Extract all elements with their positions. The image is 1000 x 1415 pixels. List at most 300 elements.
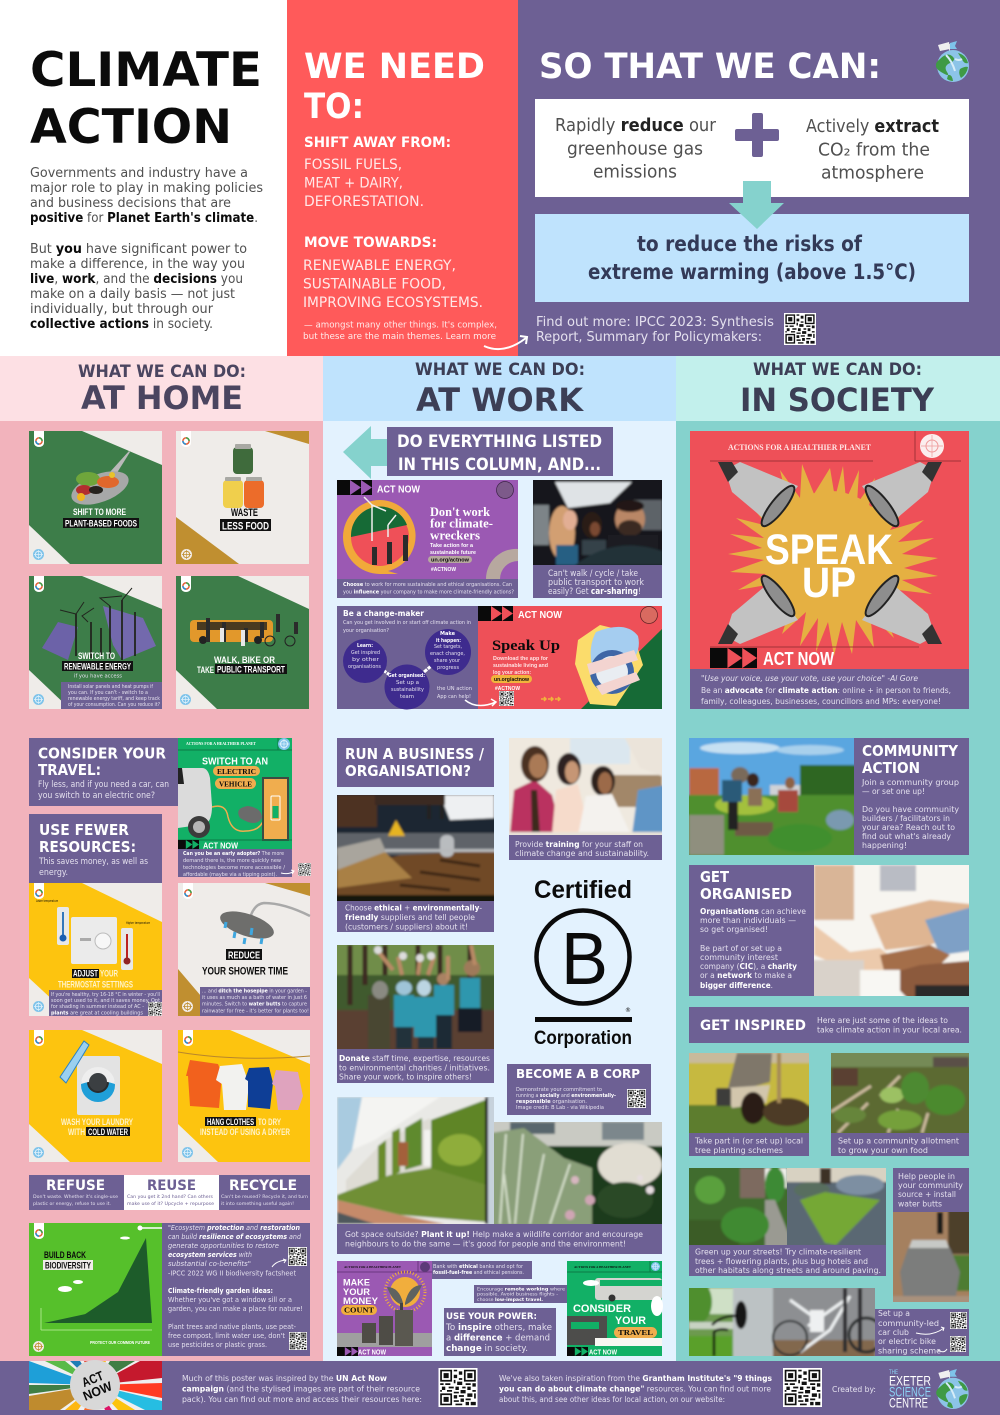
panel: we need to: — amongst many other things. It's complex, bbox=[304, 320, 497, 330]
panel: be a change-maker: Make bbox=[440, 631, 455, 637]
photo: staff training bbox=[509, 738, 662, 835]
panel: be a change-maker: organisations bbox=[348, 664, 381, 670]
intro text block: But you have significant power to bbox=[30, 242, 247, 257]
card: wash laundry cold: COLD WATER bbox=[88, 1127, 128, 1138]
text: un act now credit: pack). You can find out more and access their resources here: bbox=[182, 1395, 422, 1404]
card: adjust thermostat: YOUR bbox=[100, 968, 118, 978]
photo card: green up your streets: trees + flowering plants, plus bug hotels and bbox=[695, 1257, 868, 1266]
panel: ecosystem quote and garden ideas: garden, you can make a place for nature! bbox=[168, 1305, 303, 1313]
heading: run a business: RUN A BUSINESS / bbox=[345, 745, 484, 763]
text: grantham institute credit: you can do about climate change" resources. You can find out more bbox=[499, 1384, 771, 1394]
card: speak up app: sustainable living and bbox=[493, 663, 548, 669]
card: waste less food bbox=[176, 431, 309, 564]
card: switch to electric vehicle bbox=[178, 738, 294, 878]
card: build back biodiversity: PROTECT OUR COMMON FUTURE bbox=[90, 1340, 150, 1345]
card: consider your travel (bus and train): ACT NOW bbox=[589, 1350, 617, 1356]
card: don't work for climate-wreckers: for climate- bbox=[430, 516, 493, 530]
card: don't work for climate-wreckers bbox=[337, 480, 518, 598]
photo card: community action bbox=[679, 728, 969, 865]
panel: reuse: make use of it? Upcycle + repurpose bbox=[127, 1201, 214, 1207]
banner: do everything listed: DO EVERYTHING LISTED bbox=[397, 432, 602, 452]
photo: coffee roaster bbox=[337, 795, 494, 901]
panel: become a b corp: running a socially and environmentally- bbox=[516, 1093, 616, 1099]
photo card: community allotment: Set up a community allotment bbox=[838, 1136, 959, 1146]
card: reduce shower time bbox=[178, 883, 310, 1016]
photo: ev charger bbox=[689, 1288, 753, 1356]
card: speak up app: log your action: bbox=[493, 670, 531, 676]
logo: act now sunburst: ACT bbox=[80, 1368, 106, 1390]
card: plant-based foods: SHIFT TO MORE bbox=[73, 507, 126, 518]
photo card: coffee suppliers bbox=[327, 785, 504, 932]
card: walk, bike, public transport bbox=[176, 576, 309, 709]
card: don't work for climate-wreckers: un.org/actnow bbox=[431, 558, 470, 564]
photo: flowers and grasses bbox=[494, 1122, 662, 1224]
panel: be a change-maker: sustainability bbox=[391, 687, 424, 693]
panel: be a change-maker: Be a change-maker bbox=[343, 609, 424, 618]
heading: at home bbox=[78, 362, 246, 417]
card: speak up app bbox=[478, 606, 662, 709]
photo: joined hands bbox=[814, 865, 969, 996]
panel: use your power: USE YOUR POWER: bbox=[446, 1312, 537, 1322]
panel: use fewer resources bbox=[29, 814, 162, 883]
photo card: community allotment: to grow your own food bbox=[838, 1146, 928, 1155]
panel: use your power: change in society. bbox=[446, 1344, 528, 1354]
text: grantham institute credit: We've also taken inspiration from the Grantham Institute's "9 things bbox=[499, 1374, 772, 1383]
photo card: plant it up: Got space outside? Plant it up! Help make a wildlife corridor and encourage bbox=[345, 1230, 643, 1239]
card: walk, bike, public transport: PUBLIC TRANSPORT bbox=[217, 664, 285, 676]
panel: be a change-maker: by other bbox=[352, 657, 380, 663]
card: don't work for climate-wreckers: Don't work bbox=[430, 505, 490, 519]
panel: become a b corp bbox=[507, 1064, 651, 1115]
card: plant-based foods: PLANT-BASED FOODS bbox=[65, 518, 137, 530]
intro text block: major role to play in making policies bbox=[30, 181, 263, 196]
heading: at work bbox=[415, 360, 585, 419]
heading: at work: AT WORK bbox=[416, 381, 584, 419]
photo card: get organised: or a network to make a bbox=[700, 971, 792, 980]
panel: be a change-maker: progress bbox=[437, 665, 459, 671]
text box: ethical banks: Bank with ethical banks and opt for bbox=[433, 1264, 523, 1270]
photo card: community action: COMMUNITY bbox=[862, 742, 959, 760]
card: adjust thermostat: for shading in summer instead of AC - bbox=[51, 1004, 144, 1010]
panel: car club bbox=[875, 1309, 969, 1356]
card: switch to electric vehicle: ELECTRIC bbox=[217, 768, 256, 776]
panel: consider your travel: you switch to an electric one? bbox=[38, 791, 155, 801]
logo: exeter science centre: EXETER bbox=[889, 1374, 931, 1388]
card: waste less food: LESS FOOD bbox=[222, 520, 269, 532]
icon: sunburst bbox=[728, 464, 938, 656]
panel: ecosystem quote and garden ideas: free compost, limit water use, don't bbox=[168, 1332, 285, 1340]
panel: we need to: MOVE TOWARDS: bbox=[304, 235, 437, 251]
card: make your money count: MONEY bbox=[343, 1296, 379, 1307]
photo: people in car bbox=[533, 480, 662, 565]
intro text block: live, work, and the decisions you bbox=[30, 272, 243, 287]
photo card: community action: — or set one up! bbox=[862, 787, 925, 796]
photo card: green up your streets bbox=[679, 1158, 896, 1276]
card: speak up app: un.org/actnow bbox=[494, 677, 530, 683]
box: reduce and extract: atmosphere bbox=[821, 164, 924, 184]
logo: exeter science centre bbox=[889, 1369, 969, 1410]
photo: bike share bbox=[753, 1288, 875, 1356]
text: grantham institute credit: about this, and see other ideas for local action, on our website: bbox=[499, 1395, 725, 1404]
text box: ethical banks bbox=[432, 1261, 532, 1279]
panel: be a change-maker: your organisation? bbox=[343, 628, 389, 634]
card: speak up poster: "Use your voice, use your vote, use your choice" -Al Gore bbox=[701, 674, 918, 683]
panel: we need to: but these are the main themes. Learn more bbox=[303, 332, 496, 342]
intro text block: individually, but through our bbox=[30, 302, 214, 317]
card: plant-based foods bbox=[29, 431, 162, 564]
box: reduce and extract: CO₂ from the bbox=[818, 140, 930, 160]
text: find out more bbox=[536, 314, 774, 345]
card: renewable energy: SWITCH TO bbox=[78, 651, 115, 662]
panel: be a change-maker: team bbox=[400, 694, 414, 700]
card: make your money count: ACTIONS FOR A HEALTHIER PLANET bbox=[344, 1265, 401, 1269]
photo card: water butts: source + install bbox=[898, 1190, 956, 1199]
photo card: donate staff time bbox=[327, 935, 504, 1083]
card: consider your travel (bus and train): TRAVEL bbox=[618, 1328, 653, 1337]
heading: run a business bbox=[337, 738, 494, 787]
photo card: get organised: Be part of or set up a bbox=[700, 944, 782, 953]
panel: consider your travel bbox=[29, 738, 178, 806]
arrow: down bbox=[729, 181, 784, 229]
card: don't work for climate-wreckers: you influence your company to make more climate-friendly actions? bbox=[343, 590, 514, 596]
card: don't work for climate-wreckers: Choose to work for more sustainable and ethical organisations. Can bbox=[343, 582, 512, 588]
panel: ecosystem quote and garden ideas: Climate-friendly garden ideas: bbox=[168, 1287, 273, 1295]
text: find out more: Report, Summary for Policymakers: bbox=[536, 329, 762, 345]
card: speak up app: #ACTNOW bbox=[495, 686, 521, 692]
card: switch to electric vehicle: demand there is, the more quickly new bbox=[183, 858, 281, 864]
panel: refuse: plastic or energy, refuse to use it. bbox=[33, 1201, 111, 1207]
panel: be a change-maker: Learn: bbox=[357, 643, 373, 649]
panel: car club: community-led bbox=[878, 1319, 939, 1328]
intro text block: make on a daily basis — not just bbox=[30, 287, 235, 302]
photo card: get organised: more than individuals — bbox=[700, 916, 797, 925]
card: adjust thermostat: ADJUST bbox=[73, 968, 98, 978]
panel: we need to bbox=[303, 47, 497, 342]
card: consider your travel (bus and train) bbox=[567, 1261, 663, 1356]
text: un act now credit: Much of this poster was inspired by the UN Act Now bbox=[182, 1374, 388, 1383]
panel: become a b corp: Image credit: B Lab - via Wikipedia bbox=[516, 1105, 604, 1111]
card: waste less food: WASTE bbox=[231, 507, 258, 519]
card: reduce shower time: REDUCE bbox=[228, 950, 260, 962]
panel: reuse: REUSE bbox=[147, 1178, 196, 1194]
card: hang clothes: TO DRY bbox=[258, 1117, 281, 1128]
photo card: training bbox=[499, 728, 672, 860]
intro text block: and business decisions that are bbox=[30, 196, 231, 211]
panel: recycle: Can't be reused? Recycle it, and turn bbox=[221, 1194, 308, 1200]
box: reduce and extract: Actively extract bbox=[806, 117, 939, 137]
panel: get inspired: GET INSPIRED bbox=[700, 1018, 806, 1034]
photo card: car sharing: Can't walk / cycle / take bbox=[548, 569, 638, 579]
photo card: get organised: so get organised! bbox=[700, 925, 768, 934]
card: walk, bike, public transport: TAKE bbox=[197, 665, 214, 676]
heading: run a business: ORGANISATION? bbox=[345, 762, 471, 780]
text: created by: Created by: bbox=[832, 1385, 876, 1394]
card: don't work for climate-wreckers: Take action for a bbox=[430, 543, 474, 549]
panel: use your power bbox=[444, 1308, 556, 1356]
panel: we need to: SHIFT AWAY FROM: bbox=[304, 135, 451, 151]
panel: reuse: Can you get it 2nd hand? Can others bbox=[127, 1194, 214, 1200]
panel: get inspired bbox=[689, 1007, 969, 1043]
qr code bbox=[783, 1368, 822, 1407]
card: speak up poster: Be an advocate for climate action: online + in person to friends, bbox=[701, 686, 951, 695]
photo card: community allotment bbox=[821, 1043, 979, 1156]
qr code bbox=[438, 1368, 478, 1407]
panel: refuse: Don't waste. Whether it's single-use bbox=[33, 1194, 118, 1200]
panel: so that we can: SO THAT WE CAN: bbox=[539, 47, 881, 87]
card: reduce shower time: ... and ditch the hosepipe in your garden - bbox=[202, 988, 307, 994]
card: switch to electric vehicle: ACT NOW bbox=[203, 842, 238, 850]
panel: car club: car club bbox=[878, 1328, 909, 1337]
icon: megaphones bbox=[718, 462, 942, 644]
photo card: tree planting: Take part in (or set up) local bbox=[694, 1136, 803, 1146]
text: grantham institute credit bbox=[499, 1374, 772, 1404]
logo: certified b corporation: ® bbox=[625, 1007, 631, 1014]
card: walk, bike, public transport: WALK, BIKE OR bbox=[214, 655, 275, 666]
card: switch to electric vehicle: VEHICLE bbox=[219, 780, 252, 788]
card: renewable energy: Install solar panels and heat pumps if bbox=[68, 684, 153, 690]
card: make your money count: MAKE bbox=[343, 1278, 370, 1288]
logo: exeter science centre: THE bbox=[889, 1370, 898, 1376]
card: make your money count: COUNT bbox=[344, 1306, 374, 1314]
panel: use your power: a difference + demand bbox=[446, 1334, 550, 1344]
heading: at home: AT HOME bbox=[81, 379, 243, 417]
photo card: coffee suppliers: friendly suppliers and tell people bbox=[345, 913, 475, 922]
photo card: get organised: company (CIC), a charity bbox=[700, 962, 797, 971]
photo card: training: climate change and sustainability. bbox=[515, 849, 649, 858]
photo card: water butts: Help people in bbox=[898, 1172, 955, 1181]
title: climate action: CLIMATE bbox=[30, 43, 262, 98]
panel: use fewer resources: RESOURCES: bbox=[39, 838, 136, 856]
card: speak up app: Speak Up bbox=[492, 638, 560, 654]
box: reduce risks: extreme warming (above 1.5°C) bbox=[588, 260, 916, 284]
panel: we need to: TO: bbox=[304, 87, 364, 127]
title: climate action bbox=[30, 43, 262, 155]
panel: ecosystem quote and garden ideas: "Ecosystem protection and restoration bbox=[168, 1224, 300, 1232]
panel: use fewer resources: USE FEWER bbox=[39, 821, 129, 839]
photo card: coffee suppliers: (customers / suppliers) about it! bbox=[345, 922, 468, 932]
card: make your money count: YOUR bbox=[343, 1287, 370, 1298]
photo card: training: Provide training for your staff on bbox=[515, 840, 643, 849]
panel: we need to: SUSTAINABLE FOOD, bbox=[303, 276, 446, 292]
card: switch to electric vehicle: affordable (maybe via a tipping point). bbox=[183, 872, 277, 878]
box: reduce and extract: emissions bbox=[593, 162, 677, 182]
card: speak up app: Download the app for bbox=[493, 656, 549, 662]
card: speak up poster: family, colleagues, businesses, councillors and MPs: everyone! bbox=[701, 697, 941, 706]
panel: we need to: DEFORESTATION. bbox=[304, 194, 424, 210]
panel: become a b corp: Demonstrate your commitment to bbox=[516, 1087, 602, 1093]
photo: flower bed bbox=[787, 1168, 886, 1245]
card: adjust thermostat bbox=[29, 883, 162, 1016]
photo card: donate staff time: Donate staff time, expertise, resources bbox=[339, 1054, 490, 1063]
panel: use fewer resources: This saves money, as well as bbox=[38, 857, 149, 867]
photo card: car sharing: easily? Get car-sharing! bbox=[548, 587, 641, 597]
box: reduce and extract bbox=[535, 99, 969, 197]
photo card: car sharing bbox=[523, 470, 672, 598]
logo: certified b corporation: B bbox=[561, 917, 608, 1000]
intro text block: make a difference, in the way you bbox=[30, 257, 245, 272]
panel: ecosystem quote and garden ideas: ecosystem services with bbox=[168, 1251, 252, 1259]
text: find out more: Find out more: IPCC 2023: Synthesis bbox=[536, 314, 774, 330]
panel: use your power: To inspire others, make bbox=[445, 1323, 552, 1333]
intro text block bbox=[30, 166, 263, 332]
card: adjust thermostat: plants are great at cooling buildings bbox=[51, 1010, 144, 1016]
intro text block: positive for Planet Earth's climate. bbox=[30, 211, 258, 226]
panel: ecosystem quote and garden ideas: substantial co-benefits" bbox=[168, 1260, 251, 1268]
panel: be a change-maker: App can help! bbox=[437, 694, 471, 700]
panel: become a b corp: responsible organisation. bbox=[516, 1099, 587, 1105]
photo card: community action: builders / facilitators in bbox=[862, 814, 950, 823]
card: adjust thermostat: THERMOSTAT SETTINGS bbox=[58, 980, 133, 990]
text box: remote working: Encourage remote working where bbox=[477, 1286, 565, 1292]
logo: certified b corporation: Corporation bbox=[534, 1028, 632, 1049]
panel: consider your travel: TRAVEL: bbox=[38, 761, 101, 779]
card: reduce shower time: it uses as much as a bath of water in just 6 bbox=[202, 995, 307, 1001]
heading: at work: WHAT WE CAN DO: bbox=[415, 360, 585, 379]
panel: recycle: it into something useful again! bbox=[221, 1201, 294, 1207]
panel: refuse: REFUSE bbox=[46, 1178, 105, 1194]
photo card: get organised: GET bbox=[700, 868, 730, 886]
panel: be a change-maker: Get inspired bbox=[351, 650, 380, 656]
photo: allotment bbox=[831, 1053, 969, 1133]
panel: consider your travel: Fly less, and if you need a car, can bbox=[38, 780, 169, 790]
panel: recycle bbox=[219, 1175, 310, 1210]
photo card: water butts: water butts bbox=[898, 1200, 942, 1208]
panel: ecosystem quote and garden ideas: use pesticides or plastic grass. bbox=[168, 1341, 267, 1349]
card: renewable energy: if you have access bbox=[74, 674, 122, 680]
card: adjust thermostat: soon get used to it, and it saves money. Opt bbox=[51, 998, 160, 1004]
panel: be a change-maker: Can you get involved in or start off climate action in bbox=[343, 620, 471, 626]
card: speak up poster: ACTIONS FOR A HEALTHIER PLANET bbox=[728, 443, 872, 452]
card: build back biodiversity: BUILD BACK bbox=[44, 1250, 86, 1260]
panel: ecosystem quote and garden ideas: -IPCC 2022 WG II biodiversity factsheet bbox=[168, 1270, 296, 1278]
card: reduce shower time: rainwater for free - it's better for plants too! bbox=[202, 1008, 309, 1014]
panel: we need to: WE NEED bbox=[304, 47, 485, 87]
box: reduce risks bbox=[535, 214, 969, 302]
icon: globe bbox=[936, 41, 969, 82]
photo card: tree planting: tree planting schemes bbox=[695, 1146, 783, 1155]
card: consider your travel (bus and train): YOUR bbox=[615, 1315, 646, 1327]
photo card: plant it up: neighbours to do the same — it's good for people and the environment! bbox=[345, 1240, 626, 1248]
logo: certified b corporation bbox=[534, 876, 632, 1049]
panel: ecosystem quote and garden ideas: Plant trees and native plants, use peat- bbox=[168, 1323, 297, 1331]
card: consider your travel (bus and train): ACTIONS FOR A HEALTHIER PLANET bbox=[574, 1265, 631, 1269]
photo: planting a tree bbox=[689, 1053, 809, 1133]
photo card: get organised bbox=[689, 855, 979, 1006]
card: hang clothes bbox=[178, 1030, 310, 1162]
text box: ethical banks: fossil-fuel-free and ethical pensions. bbox=[433, 1270, 524, 1276]
photo card: green up your streets: other habitats along streets and around paving. bbox=[695, 1266, 881, 1275]
photo: water butt bbox=[893, 1212, 969, 1302]
photo card: coffee suppliers: Choose ethical + environmentally- bbox=[345, 904, 482, 912]
panel: become a b corp: BECOME A B CORP bbox=[516, 1066, 640, 1081]
panel: be a change-maker: Set targets, bbox=[434, 644, 462, 650]
card: speak up poster: ACT NOW bbox=[763, 649, 834, 669]
card: hang clothes: HANG CLOTHES bbox=[207, 1117, 254, 1128]
panel: be a change-maker: share your bbox=[434, 658, 461, 664]
card: wash laundry cold: WASH YOUR LAUNDRY bbox=[61, 1117, 133, 1128]
heading: at home: WHAT WE CAN DO: bbox=[78, 362, 246, 381]
panel: use fewer resources: energy. bbox=[39, 868, 68, 878]
photo: green wall bbox=[337, 1097, 494, 1224]
panel: ecosystem quote and garden ideas bbox=[162, 1223, 310, 1356]
photo card: community action: Do you have community bbox=[862, 805, 959, 814]
panel: get inspired: take climate action in your local area. bbox=[817, 1026, 962, 1034]
intro text block: Governments and industry have a bbox=[30, 166, 248, 181]
photo card: plant it up bbox=[327, 1087, 672, 1254]
panel: we need to: RENEWABLE ENERGY, bbox=[303, 258, 456, 274]
icon: plus bbox=[735, 113, 779, 157]
heading: in society: WHAT WE CAN DO: bbox=[753, 360, 922, 379]
card: renewable energy bbox=[29, 576, 162, 709]
card: build back biodiversity: BIODIVERSITY bbox=[45, 1260, 91, 1270]
panel: refuse bbox=[29, 1175, 124, 1210]
qr code bbox=[784, 313, 816, 345]
panel: we need to: MEAT + DAIRY, bbox=[304, 176, 403, 192]
card: adjust thermostat: If you're healthy, try 16-18 °C in winter - you'll bbox=[51, 992, 160, 998]
text box: remote working: choose low-impact travel. bbox=[477, 1297, 543, 1303]
photo card: community action: happening! bbox=[862, 841, 907, 850]
card: consider your travel (bus and train): CONSIDER bbox=[573, 1303, 631, 1315]
text box: remote working: possible. Avoid business flights - bbox=[477, 1292, 558, 1298]
card: don't work for climate-wreckers: ACT NOW bbox=[377, 484, 420, 496]
card: adjust thermostat: Higher temperature bbox=[126, 921, 150, 925]
photo card: community action: find out what's already bbox=[862, 832, 951, 841]
card: don't work for climate-wreckers: #ACTNOW bbox=[431, 567, 457, 573]
photo card: water butts bbox=[883, 1168, 979, 1312]
logo: exeter science centre: SCIENCE bbox=[889, 1384, 931, 1400]
text box: remote working bbox=[474, 1285, 568, 1303]
card: speak up poster bbox=[690, 431, 969, 709]
panel: car club: Set up a bbox=[878, 1309, 910, 1318]
panel: be a change-maker: the UN action bbox=[437, 686, 472, 692]
panel: be a change-maker: enact change, bbox=[430, 651, 465, 657]
card: speak up poster: UP bbox=[802, 559, 856, 607]
photo card: community action: your area? Reach out to bbox=[862, 823, 955, 832]
panel: be a change-maker: it happen: bbox=[436, 638, 461, 644]
panel: recycle: RECYCLE bbox=[229, 1178, 297, 1194]
photo card: tree planting bbox=[679, 1043, 819, 1156]
card: make your money count bbox=[337, 1261, 432, 1356]
panel: car club: sharing scheme bbox=[878, 1346, 941, 1356]
card: hang clothes: INSTEAD OF USING A DRYER bbox=[200, 1127, 290, 1138]
card: reduce shower time: minutes. Switch to water butts to capture bbox=[202, 1002, 307, 1008]
card: wash laundry cold bbox=[29, 1030, 162, 1162]
arrow: learn more bbox=[484, 336, 527, 349]
text: un act now credit bbox=[182, 1374, 422, 1404]
photo card: community action: Join a community group bbox=[861, 778, 959, 787]
card: switch to electric vehicle: Can you be an early adopter? The more bbox=[183, 851, 284, 857]
card: build back biodiversity bbox=[29, 1223, 167, 1356]
box: reduce risks: to reduce the risks of bbox=[637, 232, 863, 256]
photo card: get organised: ORGANISED bbox=[700, 885, 792, 903]
panel: be a change-maker bbox=[337, 606, 478, 710]
logo: certified b corporation: Certified bbox=[534, 876, 632, 904]
text: un act now credit: campaign (and the stylised images are part of their resource bbox=[182, 1384, 420, 1394]
panel: we need to: FOSSIL FUELS, bbox=[304, 157, 402, 173]
panel: ecosystem quote and garden ideas: Whether you've got a window sill or a bbox=[168, 1296, 292, 1304]
logo: exeter science centre: CENTRE bbox=[889, 1396, 928, 1410]
card: speak up poster: SPEAK bbox=[765, 526, 893, 574]
banner: do everything listed: IN THIS COLUMN, AND... bbox=[398, 455, 601, 475]
card: speak up app: ACT NOW bbox=[518, 610, 563, 621]
card: renewable energy: RENEWABLE ENERGY bbox=[64, 662, 131, 672]
panel: we need to: IMPROVING ECOSYSTEMS. bbox=[303, 295, 483, 311]
box: reduce and extract: Rapidly reduce our bbox=[555, 116, 717, 136]
panel: get inspired: Here are just some of the ideas to bbox=[817, 1016, 948, 1025]
card: wash laundry cold: WITH bbox=[68, 1127, 85, 1138]
photo card: get organised: Organisations can achieve bbox=[700, 907, 806, 916]
card: adjust thermostat: Lower temperature bbox=[36, 899, 58, 903]
